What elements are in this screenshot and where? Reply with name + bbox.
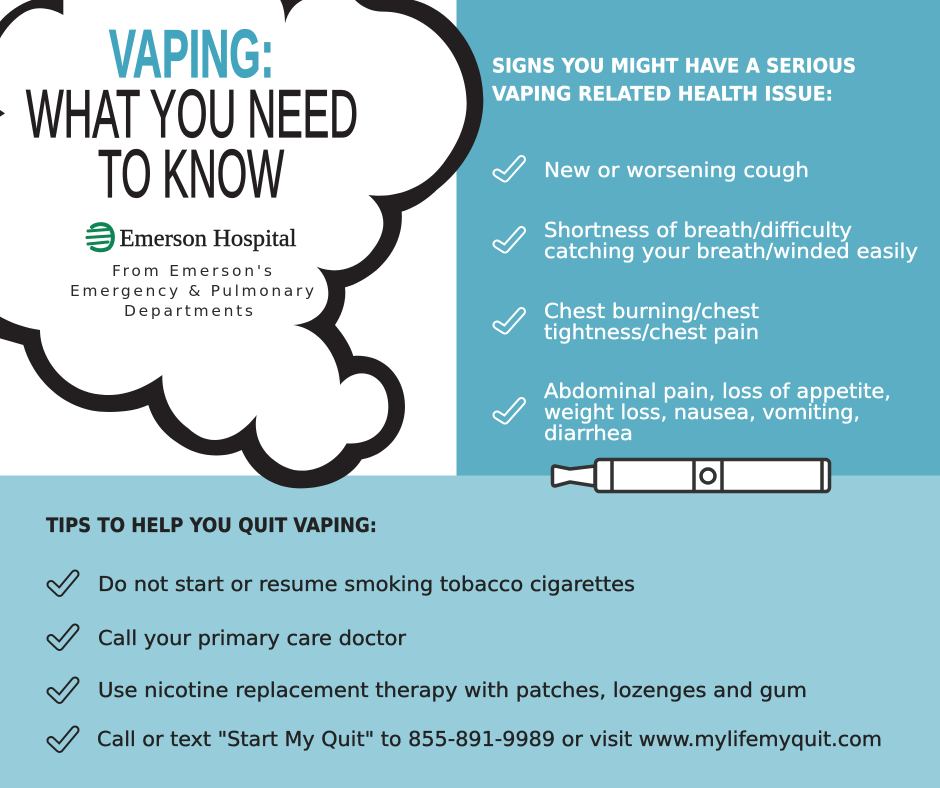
text: sign 4: weight loss, nausea, vomiting, bbox=[544, 400, 860, 424]
text: sign 3 bbox=[544, 299, 759, 344]
icon: check 4 bbox=[497, 402, 522, 420]
icon: tip check 4 bbox=[51, 730, 75, 748]
text: tip 1: Do not start or resume smoking tobacco cigarettes bbox=[98, 572, 635, 596]
text: sign 4: Abdominal pain, loss of appetite, bbox=[544, 379, 891, 403]
heading: quitting tips: TIPS TO HELP YOU QUIT VAPING: bbox=[46, 514, 377, 537]
illustration: smoke cloud bbox=[0, 0, 483, 488]
text: sign 3: Chest burning/chest bbox=[544, 299, 759, 323]
text: sign 4: diarrhea bbox=[544, 421, 633, 445]
icon: check 3 bbox=[497, 312, 522, 330]
text: tip 2: Call your primary care doctor bbox=[98, 626, 407, 650]
heading: warning signs: VAPING RELATED HEALTH ISSUE: bbox=[492, 82, 833, 106]
text: source departments bbox=[70, 262, 314, 320]
text: sign 2: Shortness of breath/difficulty bbox=[544, 218, 852, 242]
panel: warning signs bbox=[456, 0, 940, 476]
text: sign 4 bbox=[544, 379, 891, 445]
text: tip 3: Use nicotine replacement therapy with patches, lozenges and gum bbox=[98, 678, 807, 702]
text: sign 2 bbox=[544, 218, 918, 263]
icon: tip check 1 bbox=[51, 574, 75, 592]
icon: check 2 bbox=[497, 230, 522, 249]
text: sign 2: catching your breath/winded easily bbox=[544, 239, 918, 263]
panel: quitting tips bbox=[0, 476, 940, 788]
text: sign 3: tightness/chest pain bbox=[544, 320, 759, 344]
title line: to know: TO KNOW bbox=[98, 136, 284, 212]
icon: check 1 bbox=[497, 160, 522, 178]
text: sign 1: New or worsening cough bbox=[544, 158, 809, 182]
text: source departments: Emergency & Pulmonary bbox=[70, 282, 314, 300]
heading: warning signs: SIGNS YOU MIGHT HAVE A SERIOUS bbox=[492, 54, 856, 78]
icon: tip check 3 bbox=[51, 681, 75, 700]
title line: vaping: VAPING: bbox=[109, 16, 274, 92]
text: tip 4: Call or text "Start My Quit" to 855-891-9989 or visit www.mylifemyquit.com bbox=[97, 727, 882, 751]
text: source departments: Departments bbox=[124, 302, 253, 320]
text: source departments: From Emerson's bbox=[112, 262, 272, 280]
icon: vape pen bbox=[552, 460, 830, 492]
logo: Emerson Hospital bbox=[87, 224, 297, 252]
title bbox=[26, 16, 358, 212]
title line: what you need: WHAT YOU NEED bbox=[26, 76, 358, 152]
icon: tip check 2 bbox=[51, 628, 75, 646]
heading: warning signs bbox=[492, 54, 856, 106]
logo wordmark: Emerson Hospital bbox=[120, 226, 297, 252]
icon: hospital emblem bbox=[87, 224, 113, 250]
